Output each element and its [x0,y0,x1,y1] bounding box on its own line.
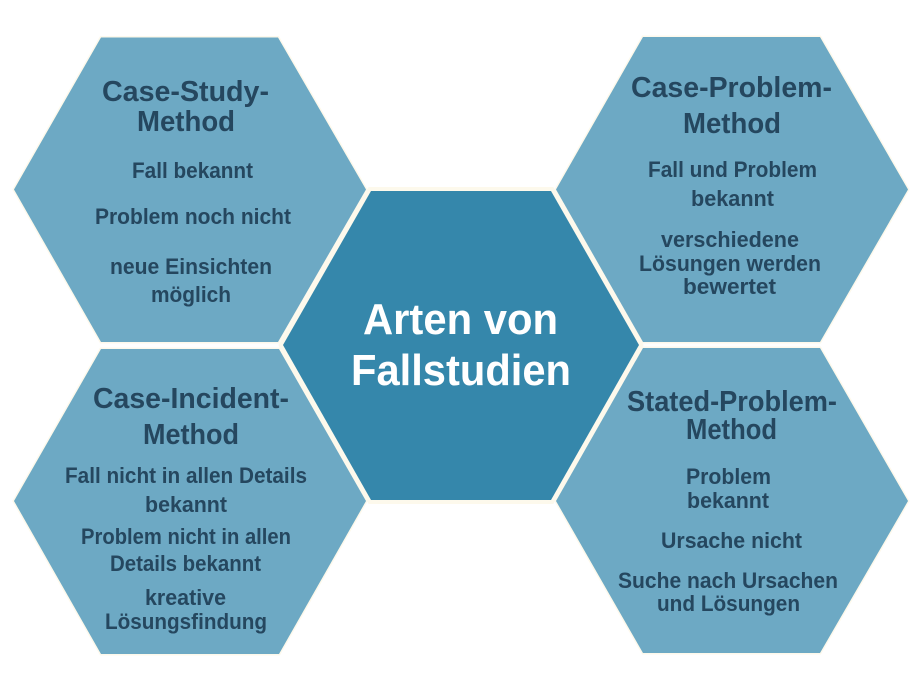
text block: Case-Problem-Method points: Lösungen werden [639,251,821,276]
panel: Case-Problem-Method [556,37,908,342]
text block: Case-Problem-Method points: bekannt [691,186,775,211]
text block: Case-Study-Method points: Fall bekannt [132,158,254,183]
text block: Stated-Problem-Method points: Problem [686,464,771,489]
text block: Case-Incident-Method points: bekannt [145,492,228,517]
heading: Stated-Problem-Method: Method [686,414,777,446]
heading: Case-Problem-Method: Method [683,108,781,140]
text block: Case-Incident-Method points: kreative [145,585,226,610]
heading: Case-Study-Method: Case-Study- [102,76,269,108]
title: Arten von [363,295,558,344]
text block: Case-Problem-Method points: Fall und Problem [648,157,817,182]
text block: Case-Incident-Method points: Problem nicht in allen [81,524,291,549]
text block: Case-Incident-Method points: Fall nicht in allen Details [65,463,307,488]
heading: Case-Incident-Method [93,383,289,451]
text block: Stated-Problem-Method points [618,464,838,616]
heading: Stated-Problem-Method: Stated-Problem- [627,386,837,418]
heading: Stated-Problem-Method [627,386,837,446]
text block: Case-Problem-Method points [639,157,821,299]
text block: Stated-Problem-Method points: und Lösungen [657,591,800,616]
heading: Case-Study-Method: Method [137,106,235,138]
heading: Case-Incident-Method: Method [143,419,239,451]
panel: Stated-Problem-Method [556,348,908,653]
text block: Stated-Problem-Method points: Ursache nicht [661,528,803,553]
text block: Case-Study-Method points: neue Einsichten [110,254,272,279]
title: Fallstudien [351,346,571,395]
text block: Case-Study-Method points: möglich [151,282,231,307]
panel: center hexagon [283,191,639,500]
text block: Case-Study-Method points: Problem noch nicht [95,204,292,229]
heading: Case-Problem-Method [631,72,832,140]
text block: Case-Incident-Method points: Details bekannt [110,551,262,576]
heading: Case-Problem-Method: Case-Problem- [631,72,832,104]
text block: Stated-Problem-Method points: bekannt [687,488,770,513]
text block: Case-Incident-Method points [65,463,307,634]
panel: Case-Incident-Method [14,349,366,654]
title [351,295,571,395]
text block: Case-Problem-Method points: verschiedene [661,227,799,252]
heading: Case-Study-Method [102,76,269,138]
text block: Case-Incident-Method points: Lösungsfindung [105,609,267,634]
text block: Stated-Problem-Method points: Suche nach Ursachen [618,568,838,593]
panel: Case-Study-Method [14,38,366,342]
text block: Case-Problem-Method points: bewertet [683,274,777,299]
heading: Case-Incident-Method: Case-Incident- [93,383,289,415]
text block: Case-Study-Method points [95,158,292,307]
